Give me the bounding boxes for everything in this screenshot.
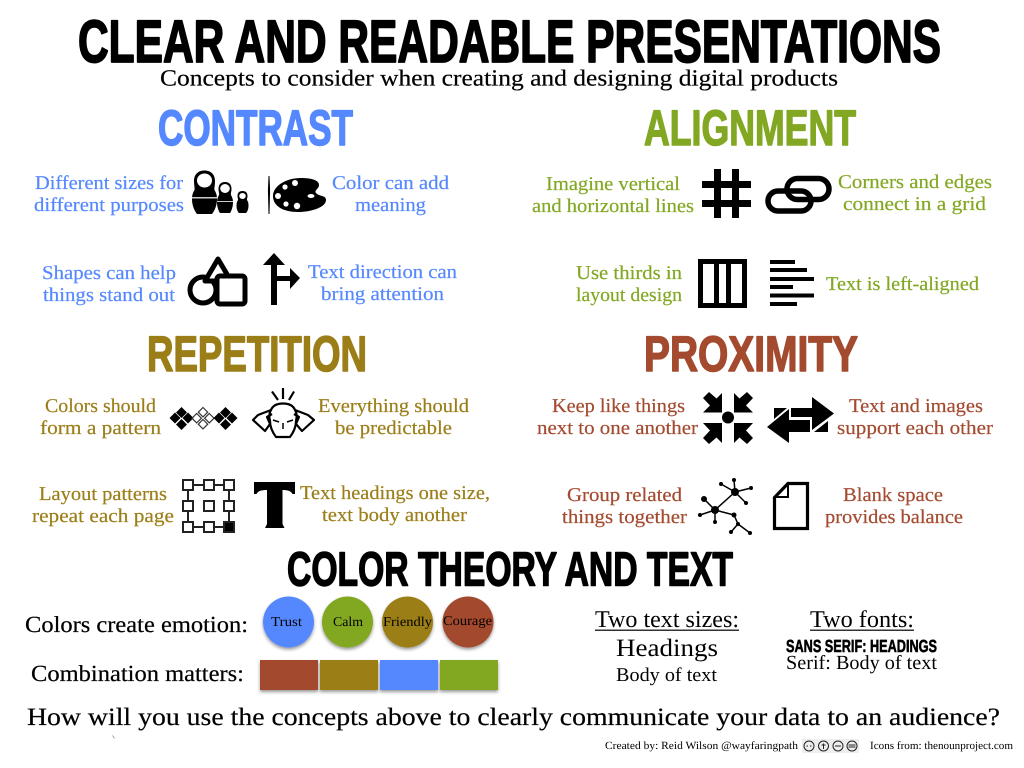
text: grid lines: Imagine vertical [546,174,681,195]
text: different sizes [34,173,184,216]
text: predictable [318,396,469,439]
heading: proximity: PROXIMITY [644,326,858,382]
text: headings size: text body another [322,505,468,526]
text: color meaning [332,173,449,216]
panel: color theory and text [25,544,937,690]
circle: friendly [382,596,433,648]
footer [605,739,1013,753]
icon credit: Icons from: thenounproject.com [870,740,1013,752]
circle: trust: Trust [271,614,302,629]
text: colors pattern: Colors should [45,396,156,417]
icon: three columns [698,259,747,308]
text: corners and edges: Corners and edges [838,172,992,193]
text: thirds [576,263,682,306]
text: headings size [300,483,490,526]
block: two fonts: SANS SERIF: HEADINGS [786,636,937,656]
icon: nesting dolls [192,170,248,214]
text: left aligned: Text is left-aligned [826,274,979,295]
text: different sizes: different purposes [34,195,184,216]
panel: proximity [537,326,994,535]
heading: alignment: ALIGNMENT [644,100,856,156]
text: blank space: Blank space [843,485,943,506]
block: two text sizes: Two text sizes: [595,607,739,633]
circle: calm [322,596,373,648]
credit: Created by: Reid Wilson @wayfaringpath [605,740,799,752]
color swatches [260,660,498,690]
circle: calm: Calm [333,614,364,629]
text: grid lines [532,174,694,217]
block: two text sizes: Headings [616,635,718,662]
panel: alignment [532,100,992,308]
text: grid lines: and horizontal lines [532,196,694,217]
circle: friendly: Friendly [383,614,432,629]
block: two fonts [786,607,937,674]
label: combination matters: Combination matters: [31,661,244,686]
circle: courage [442,596,494,648]
text: group related: things together [562,507,688,528]
creative commons badges [802,739,859,753]
text: predictable: Everything should [318,396,469,417]
text: color meaning: meaning [355,195,426,216]
icon: arrows converging [703,392,753,444]
text: colors pattern: form a pattern [40,418,161,439]
text: shapes: things stand out [43,285,176,306]
icon: chain link [768,178,829,211]
text: blank space: provides balance [825,507,963,528]
text: corners and edges: connect in a grid [843,194,986,215]
block: two text sizes: Body of text [616,665,718,686]
text: shapes: Shapes can help [42,263,176,284]
icon: palette and brush [268,176,326,214]
text: direction: bring attention [321,284,444,305]
text: headings size: Text headings one size, [300,483,490,504]
text: group related [562,485,688,528]
block: two fonts: Serif: Body of text [786,652,937,674]
text: corners and edges [838,172,992,215]
text: text and images: support each other [837,418,994,439]
emotion circles [263,596,494,648]
heading: contrast: CONTRAST [158,100,353,156]
icon: hash grid [702,169,751,218]
circle: courage: Courage [443,613,492,628]
block: two text sizes [595,607,739,686]
icon: shapes [190,259,245,304]
text: text and images [837,396,994,439]
text: keep like things [537,396,699,439]
text: text and images: Text and images [849,396,983,417]
text: group related: Group related [567,485,682,506]
icon: direction arrow [263,253,300,305]
text: blank space [825,485,963,528]
icon: head with ears [253,388,314,437]
subtitle: Concepts to consider when creating and designing digital products [160,66,838,90]
icon: blank page [774,484,808,528]
text: keep like things: next to one another [537,418,699,439]
text: direction: Text direction can [308,262,457,283]
heading: repetition: REPETITION [147,326,367,382]
icon: network [698,478,753,535]
closing question: How will you use the concepts above to clearly communicate your data to an audience? [27,704,1000,731]
text: color meaning: Color can add [332,173,449,194]
panel: contrast [34,100,457,306]
heading: color theory: COLOR THEORY AND TEXT [287,544,733,596]
block: two fonts: Two fonts: [810,607,914,633]
icon: letter T [254,482,295,528]
text: keep like things: Keep like things [552,396,685,417]
icon: node grid [183,480,234,532]
icon: diamond pattern [170,407,238,430]
label: colors create emotion: Colors create emotion: [25,612,248,637]
text: colors pattern [40,396,161,439]
circle: trust [263,596,314,648]
text: predictable: be predictable [335,418,452,439]
panel: repetition [32,326,490,532]
text: thirds: Use thirds in [576,263,682,284]
text: thirds: layout design [576,285,682,306]
text: layout patterns: repeat each page [32,506,174,527]
text: different sizes: Different sizes for [35,173,184,194]
icon: exchange arrows [767,397,834,443]
text: shapes [42,263,176,306]
text: direction [308,262,457,305]
text: layout patterns: Layout patterns [39,484,167,505]
icon: left-aligned lines [770,260,814,306]
text: layout patterns [32,484,174,527]
